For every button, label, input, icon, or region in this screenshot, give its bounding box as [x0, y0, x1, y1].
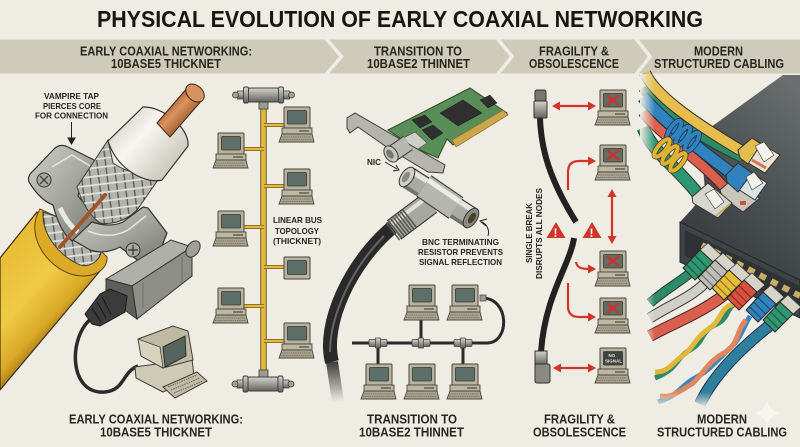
soft left fade of cabling	[640, 74, 655, 409]
vampire tap pin	[60, 195, 105, 247]
label: BNC terminating resistor: BNC TERMINATING	[422, 237, 499, 247]
heading: modern: STRUCTURED CABLING	[654, 57, 784, 71]
watermark sparkle	[753, 400, 781, 426]
arrow: BNC terminator	[480, 219, 489, 236]
label: vampire tap	[35, 91, 108, 120]
heading: transition: TRANSITION TO	[374, 44, 462, 58]
footer label: fragility: OBSOLESCENCE	[533, 426, 626, 440]
vintage computer	[135, 326, 207, 398]
illustration: modern structured cabling	[643, 73, 800, 404]
warning triangles: !	[590, 226, 594, 240]
top BNC	[534, 90, 547, 118]
label: vampire tap: VAMPIRE TAP	[44, 91, 99, 101]
failed computers	[595, 90, 630, 383]
transceiver cable	[75, 318, 138, 392]
copper core	[157, 80, 208, 137]
lower patch cords	[650, 274, 769, 404]
footer label: modern	[657, 412, 787, 440]
port row	[702, 245, 800, 296]
computers	[213, 107, 314, 358]
BNC T-connector	[392, 165, 482, 232]
drop lines	[378, 320, 463, 365]
heading: transition	[367, 44, 470, 71]
clamp lower band	[73, 207, 167, 273]
top terminator	[232, 87, 294, 109]
illustration: network card	[347, 88, 508, 173]
heading: early coaxial: 10BASE5 THICKNET	[111, 57, 221, 71]
upper patch cords	[643, 73, 742, 193]
label: single break: DISRUPTS ALL NODES	[534, 188, 544, 279]
clamp upper lobe	[28, 145, 102, 241]
label: single break	[524, 188, 544, 279]
twisted yellow and green pair	[655, 304, 735, 378]
yellow plug	[738, 138, 780, 173]
switch recess	[685, 230, 800, 310]
footer label: modern: MODERN	[697, 412, 747, 426]
coax loop	[352, 298, 504, 343]
label: BNC terminating resistor: SIGNAL REFLECTION	[419, 257, 502, 267]
title: PHYSICAL EVOLUTION OF EARLY COAXIAL NETWORKING	[97, 6, 703, 32]
label: linear bus: LINEAR BUS	[273, 215, 322, 225]
yellow cut lip	[35, 209, 107, 276]
switch front face	[680, 222, 800, 318]
heading: early coaxial	[80, 44, 252, 71]
footer label: modern: STRUCTURED CABLING	[657, 426, 787, 440]
lower braided shield	[43, 212, 101, 266]
footer label: early coaxial	[69, 412, 243, 440]
circuit board	[388, 88, 507, 158]
tee connectors	[369, 295, 486, 348]
illustration: thicknet cable with vampire tap	[0, 80, 208, 398]
yellow cable tie	[652, 137, 688, 173]
heading: fragility: FRAGILITY &	[539, 44, 609, 58]
transceiver box	[106, 238, 203, 319]
blue plug	[726, 163, 767, 200]
footer label: early coaxial: 10BASE5 THICKNET	[100, 426, 212, 440]
label: linear bus: TOPOLOGY	[275, 226, 319, 236]
warning triangles: !	[554, 226, 558, 240]
metal bracket	[347, 113, 445, 173]
heading: fragility	[529, 44, 619, 71]
network switch top	[680, 75, 800, 280]
connector plug	[85, 289, 127, 326]
stem with knurled collar	[392, 198, 430, 232]
label: linear bus	[270, 213, 326, 247]
label: linear bus: (THICKNET)	[273, 236, 321, 246]
yellow coax jacket	[0, 212, 105, 390]
footer label: early coaxial: EARLY COAXIAL NETWORKING:	[69, 412, 243, 426]
footer label: fragility	[533, 412, 626, 440]
heading: transition: 10BASE2 THINNET	[367, 57, 470, 71]
blue cable tie	[664, 119, 702, 153]
chips	[412, 95, 497, 140]
footer label: transition	[359, 412, 464, 440]
footer label: fragility: FRAGILITY &	[544, 412, 615, 426]
warning triangles	[546, 222, 602, 240]
bottom BNC	[535, 351, 550, 383]
computers	[361, 285, 482, 399]
lower plugs	[683, 243, 800, 332]
white dielectric	[108, 107, 188, 181]
footer label: transition: 10BASE2 THINNET	[359, 426, 464, 440]
thinnet cable body	[330, 226, 394, 402]
label: vampire tap: PIERCES CORE	[43, 101, 101, 111]
silver port housing	[403, 132, 427, 151]
footer label: transition: TRANSITION TO	[367, 412, 457, 426]
yellow bus	[260, 106, 267, 372]
upper plugs	[692, 138, 780, 218]
soft bottom fade of cabling	[640, 392, 740, 408]
upper cable	[540, 118, 576, 222]
heading: modern: MODERN	[694, 44, 743, 58]
white plug	[692, 183, 732, 218]
twisted blue and orange pair	[658, 316, 750, 402]
gold fingers	[452, 110, 508, 147]
header banner with four section headings	[0, 38, 800, 75]
red signal arrows	[552, 102, 616, 372]
illustration: broken coax cable	[534, 90, 576, 383]
label: vampire tap: FOR CONNECTION	[35, 110, 108, 120]
label: single break: SINGLE BREAK	[524, 202, 534, 263]
grey plug	[720, 183, 760, 212]
heading: fragility: OBSOLESCENCE	[529, 57, 619, 71]
bottom terminator	[232, 370, 294, 392]
BNC port on bracket	[381, 143, 408, 165]
upper braided shield	[77, 140, 160, 223]
heading: modern	[654, 44, 784, 71]
label: NIC: NIC	[367, 157, 381, 167]
failed computers: NO	[608, 353, 616, 358]
arrow: vampire tap	[68, 122, 75, 144]
failed computers: SIGNAL	[605, 358, 622, 364]
arrow: NIC	[385, 162, 399, 171]
heading: early coaxial: EARLY COAXIAL NETWORKING:	[80, 44, 252, 58]
main barrel	[396, 165, 482, 230]
label: BNC terminating resistor: RESISTOR PREVENTS	[418, 247, 503, 257]
label: BNC terminating resistor	[418, 237, 503, 267]
lower cable	[541, 238, 574, 352]
diagram: thinnet bus	[352, 285, 504, 399]
diagram: linear bus topology	[213, 87, 314, 392]
